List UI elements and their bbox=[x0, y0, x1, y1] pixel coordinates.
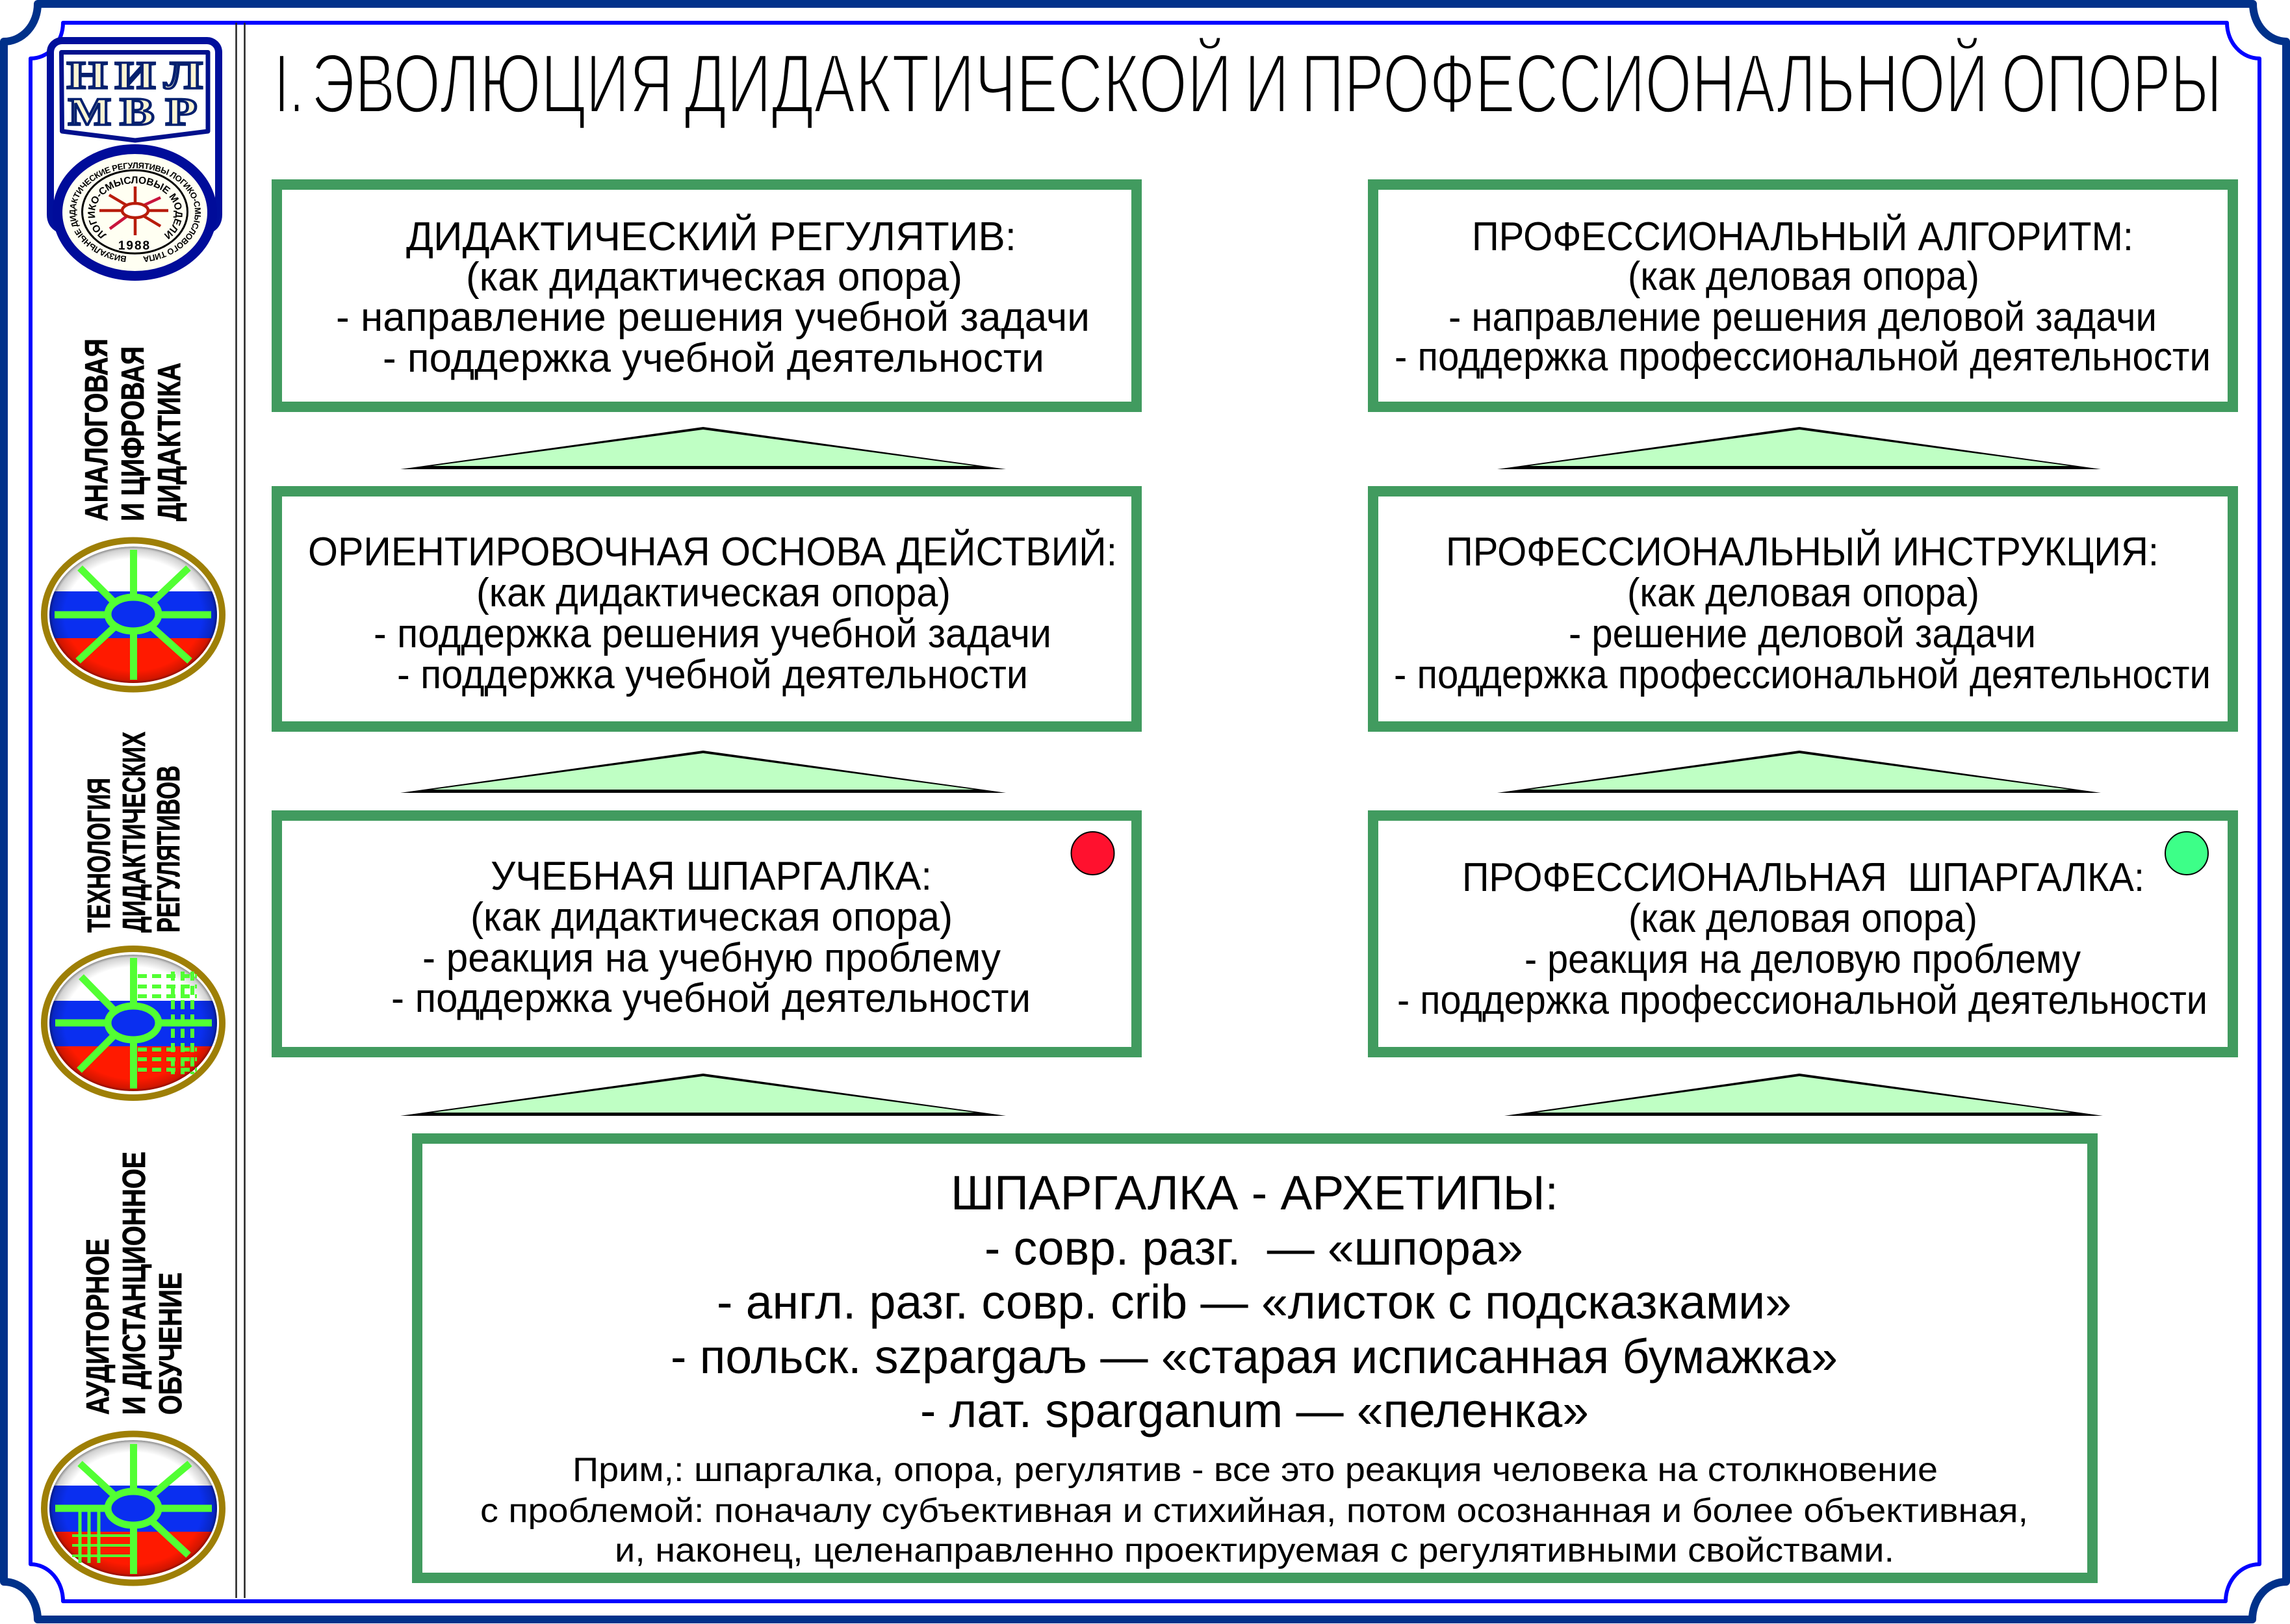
panel: orienting basis of actions: (как дидактическая опора) bbox=[476, 571, 951, 615]
arrow: row 2 to row 1 left bbox=[400, 427, 1006, 469]
panel: study cheat sheet: - реакция на учебную проблему bbox=[422, 936, 1001, 981]
side label 3: ОБУЧЕНИЕ bbox=[153, 1272, 188, 1415]
logo letters: Л bbox=[164, 54, 203, 97]
archetypes heading: ШПАРГАЛКА - АРХЕТИПЫ: bbox=[951, 1166, 1558, 1220]
panel: orienting basis of actions: - поддержка решения учебной задачи bbox=[374, 612, 1051, 656]
panel: study cheat sheet: (как дидактическая опора) bbox=[470, 895, 953, 940]
panel: professional cheat sheet: - поддержка профессиональной деятельности bbox=[1397, 978, 2207, 1023]
panel: didactic regulative bbox=[277, 185, 1137, 407]
title: ПРОФЕССИОНАЛЬНОЙ bbox=[1301, 36, 1988, 131]
arrow: row 2 to row 1 right bbox=[1497, 427, 2101, 469]
panel: professional instruction: - поддержка профессиональной деятельности bbox=[1394, 652, 2211, 697]
panel: professional cheat sheet: ПРОФЕССИОНАЛЬНАЯ ШПАРГАЛКА: bbox=[1462, 855, 2144, 900]
medallion year: 1988 bbox=[118, 239, 151, 253]
panel: study cheat sheet: УЧЕБНАЯ ШПАРГАЛКА: bbox=[491, 854, 932, 899]
archetypes list: - польск. szpargaљ — «старая исписанная бумажка» bbox=[671, 1330, 1838, 1384]
panel: professional cheat sheet bbox=[1373, 816, 2233, 1052]
panel: didactic regulative: - направление решения учебной задачи bbox=[336, 295, 1090, 340]
panel: professional algorithm: ПРОФЕССИОНАЛЬНЫЙ АЛГОРИТМ: bbox=[1472, 214, 2133, 259]
title: I. bbox=[274, 37, 304, 131]
panel: professional cheat sheet: - реакция на деловую проблему bbox=[1525, 937, 2081, 982]
logo letters: Р bbox=[166, 90, 197, 134]
title: ЭВОЛЮЦИЯ bbox=[311, 37, 673, 131]
title: ДИДАКТИЧЕСКОЙ bbox=[684, 36, 1232, 131]
archetypes list bbox=[671, 1221, 1838, 1437]
sidebar divider bbox=[237, 23, 244, 1598]
archetypes list: - лат. sparganum — «пеленка» bbox=[920, 1384, 1589, 1437]
panel: didactic regulative: - поддержка учебной деятельности bbox=[383, 336, 1044, 381]
arrow: row 3 to row 2 right bbox=[1497, 751, 2101, 793]
arrow: archetypes to row 3 left bbox=[400, 1074, 1006, 1116]
logo letters: Н bbox=[67, 54, 107, 97]
archetypes note bbox=[480, 1451, 2028, 1569]
side label 3: АУДИТОРНОЕ bbox=[81, 1239, 116, 1415]
icon: red dot bbox=[1071, 832, 1114, 875]
medallion sun bbox=[99, 187, 168, 235]
side label 3: И ДИСТАНЦИОННОЕ bbox=[117, 1152, 152, 1415]
side label 2: РЕГУЛЯТИВОВ bbox=[151, 766, 187, 933]
panel: study cheat sheet bbox=[277, 816, 1137, 1052]
side label 1: И ЦИФРОВАЯ bbox=[116, 346, 151, 521]
panel: professional instruction: (как деловая опора) bbox=[1627, 571, 1979, 615]
icon: flag emblem 1 bbox=[44, 541, 222, 689]
panel: professional algorithm: - направление решения деловой задачи bbox=[1448, 295, 2157, 340]
icon: flag emblem 3 bbox=[44, 1434, 222, 1583]
title bbox=[274, 36, 2222, 131]
logo pentagon bbox=[61, 52, 208, 140]
panel: study cheat sheet: - поддержка учебной деятельности bbox=[391, 976, 1031, 1021]
logo bbox=[47, 37, 222, 281]
side label 1: ДИДАКТИКА bbox=[152, 363, 187, 521]
panel: cheat sheet archetypes bbox=[417, 1139, 2092, 1578]
panel: professional instruction bbox=[1373, 491, 2233, 727]
logo letters: М bbox=[68, 91, 111, 134]
logo medallion bbox=[54, 144, 215, 281]
panel: orienting basis of actions bbox=[277, 491, 1137, 727]
archetypes list: - англ. разг. совр. crib — «листок с подсказками» bbox=[717, 1275, 1792, 1329]
logo letters bbox=[67, 54, 203, 134]
icon: flag emblem 2 bbox=[44, 949, 222, 1098]
logo letters: И bbox=[115, 54, 155, 97]
side label 3 bbox=[81, 1152, 188, 1415]
arrow: row 3 to row 2 left bbox=[400, 751, 1006, 793]
side label 2: ДИДАКТИЧЕСКИХ bbox=[117, 732, 152, 933]
medallion inner text: ЛОГИКО-СМЫСЛОВЫЕ МОДЕЛИ bbox=[88, 177, 183, 239]
side label 2: ТЕХНОЛОГИЯ bbox=[82, 778, 117, 933]
panel: professional instruction: - решение деловой задачи bbox=[1569, 612, 2036, 656]
icon: green dot bbox=[2165, 832, 2208, 875]
logo letters: В bbox=[120, 90, 155, 134]
logo shield bbox=[51, 40, 218, 229]
panel: professional instruction: ПРОФЕССИОНАЛЬНЫЙ ИНСТРУКЦИЯ: bbox=[1446, 529, 2159, 574]
archetypes note: и, наконец, целенаправленно проектируемая с регулятивными свойствами. bbox=[615, 1532, 1894, 1569]
panel: orienting basis of actions: - поддержка учебной деятельности bbox=[397, 652, 1028, 697]
panel: professional algorithm bbox=[1373, 185, 2233, 407]
panel: professional algorithm: - поддержка профессиональной деятельности bbox=[1395, 335, 2211, 380]
side label 1: АНАЛОГОВАЯ bbox=[79, 339, 114, 521]
panel: didactic regulative: ДИДАКТИЧЕСКИЙ РЕГУЛЯТИВ: bbox=[406, 214, 1016, 259]
panel: professional cheat sheet: (как деловая опора) bbox=[1628, 896, 1977, 941]
archetypes note: с проблемой: поначалу субъективная и стихийная, потом осознанная и более объективная, bbox=[480, 1492, 2028, 1530]
side label 1 bbox=[79, 339, 187, 521]
medallion outer text: ВИЗУАЛЬНЫЕ ДИДАКТИЧЕСКИЕ РЕГУЛЯТИВЫ ЛОГИКО-СМЫСЛОВОГО ТИПА bbox=[70, 162, 201, 263]
archetypes note: Прим,: шпаргалка, опора, регулятив - все это реакция человека на столкновение bbox=[572, 1451, 1938, 1489]
arrow: archetypes to row 3 right bbox=[1504, 1074, 2103, 1116]
panel: professional algorithm: (как деловая опора) bbox=[1628, 254, 1979, 299]
panel: didactic regulative: (как дидактическая опора) bbox=[466, 255, 962, 300]
side label 2 bbox=[82, 732, 187, 933]
title: И bbox=[1244, 37, 1289, 131]
archetypes list: - совр. разг. — «шпора» bbox=[984, 1221, 1523, 1275]
panel: orienting basis of actions: ОРИЕНТИРОВОЧНАЯ ОСНОВА ДЕЙСТВИЙ: bbox=[308, 529, 1117, 574]
